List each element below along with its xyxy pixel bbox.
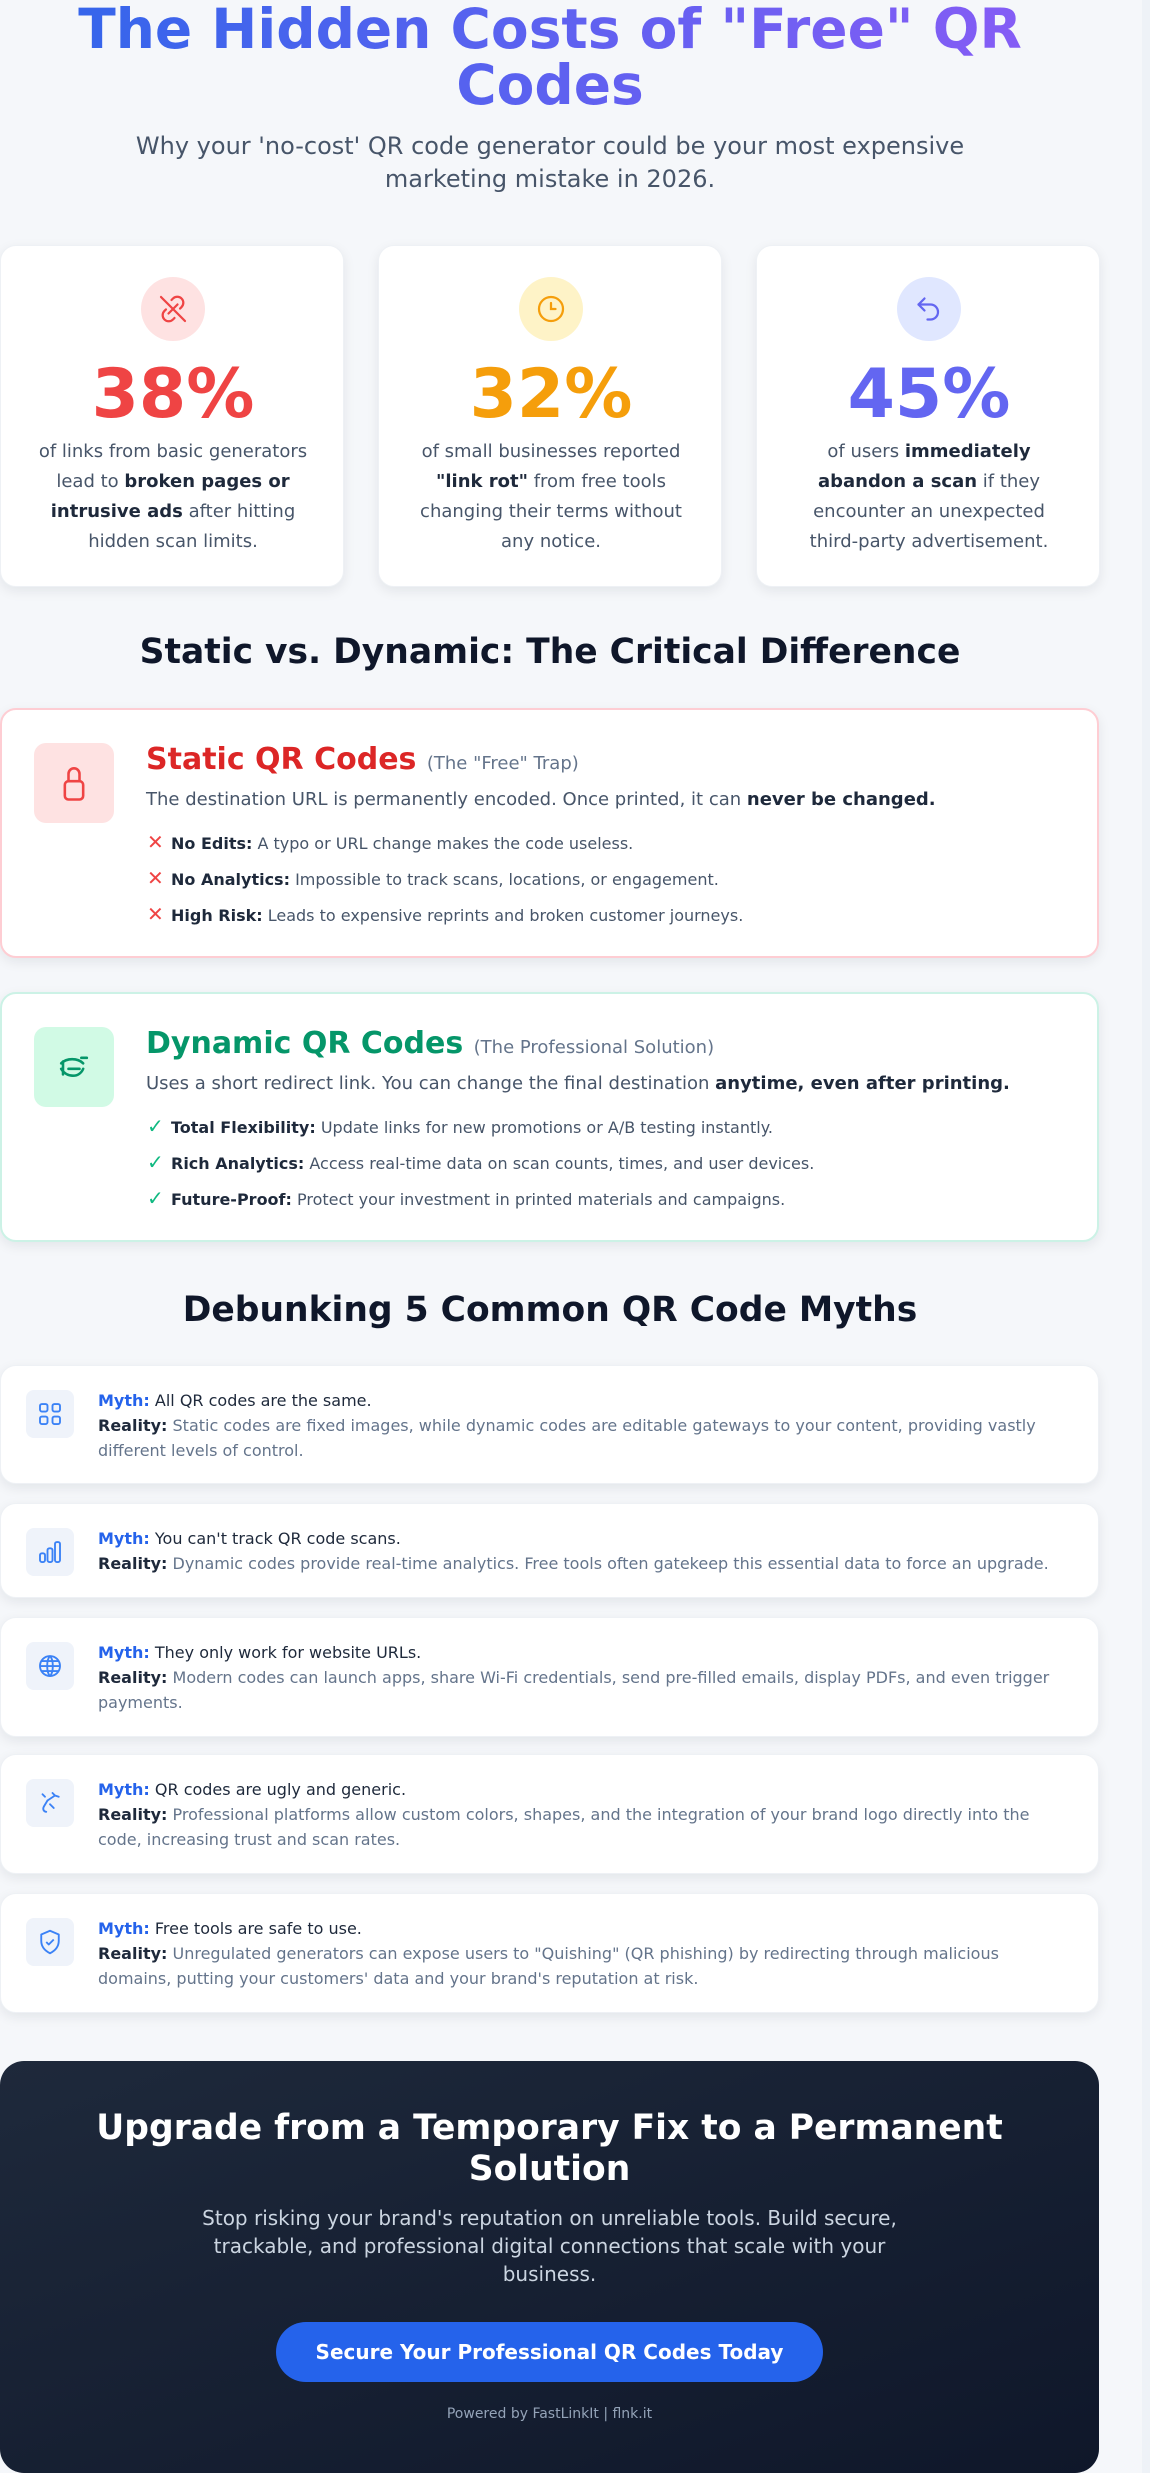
myth text: Reality: Static codes are fixed images, while dynamic codes are editable gateways to your content, providing vastly different levels of control.	[98, 1416, 1036, 1460]
panel: dynamic QR codes	[0, 992, 1099, 1242]
icon: globe	[26, 1642, 74, 1690]
static bullets: ✕	[147, 902, 164, 926]
icon: broken link	[141, 277, 205, 341]
icon: brush	[26, 1779, 74, 1827]
dynamic bullets	[147, 1114, 814, 1210]
dynamic description: Uses a short redirect link. You can change the final destination anytime, even after printing.	[146, 1073, 1010, 1094]
stat card 1	[0, 245, 344, 587]
static bullets: No Edits: A typo or URL change makes the code useless.	[171, 834, 633, 853]
stat card 3	[756, 245, 1100, 587]
myth card 4	[0, 1754, 1099, 1874]
dynamic bullets: Future-Proof: Protect your investment in printed materials and campaigns.	[171, 1190, 785, 1209]
myth text: Myth: You can't track QR code scans.	[98, 1529, 401, 1548]
subtitle: Why your 'no-cost' QR code generator could be your most expensive marketing mistake in 2026.	[136, 132, 964, 193]
CTA button: Secure Your Professional QR Codes Today	[316, 2340, 783, 2364]
dynamic bullets: ✓	[147, 1186, 164, 1210]
static bullets: High Risk: Leads to expensive reprints and broken customer journeys.	[171, 906, 743, 925]
footer: Powered by FastLinkIt | flnk.it	[447, 2406, 652, 2422]
myth text	[98, 1529, 1049, 1573]
static bullets: No Analytics: Impossible to track scans, locations, or engagement.	[171, 870, 719, 889]
static bullets: ✕	[147, 830, 164, 854]
stat card 2	[378, 245, 722, 587]
title	[0, 1, 1100, 113]
myth text: Reality: Professional platforms allow custom colors, shapes, and the integration of your brand logo directly into the code, increasing trust and scan rates.	[98, 1805, 1030, 1849]
myth text: Myth: Free tools are safe to use.	[98, 1919, 362, 1938]
stat text: of links from basic generators lead to broken pages or intrusive ads after hitting hidden scan limits.	[39, 441, 307, 552]
static title: Static QR Codes (The "Free" Trap)	[146, 742, 579, 777]
dynamic bullets: ✓	[147, 1114, 164, 1138]
heading: myths: Debunking 5 Common QR Code Myths	[183, 1290, 917, 1330]
myth text	[98, 1780, 1030, 1849]
myth text: Myth: All QR codes are the same.	[98, 1391, 372, 1410]
CTA text: Stop risking your brand's reputation on unreliable tools. Build secure, trackable, and professional digital connections that scale with your business.	[202, 2206, 897, 2286]
myth text	[98, 1643, 1050, 1712]
panel: call to action	[0, 2061, 1099, 2473]
right edge strip	[1142, 0, 1150, 2473]
dynamic bullets: ✓	[147, 1150, 164, 1174]
icon: return arrow	[897, 277, 961, 341]
myth card 1	[0, 1365, 1099, 1484]
icon: bar chart	[26, 1528, 74, 1576]
myth text	[98, 1391, 1036, 1460]
dynamic bullets: Rich Analytics: Access real-time data on scan counts, times, and user devices.	[171, 1154, 814, 1173]
panel: static QR codes	[0, 708, 1099, 958]
myth text	[98, 1919, 999, 1988]
myth card 2	[0, 1503, 1099, 1598]
static bullets: ✕	[147, 866, 164, 890]
myth text: Reality: Dynamic codes provide real-time analytics. Free tools often gatekeep this essential data to force an upgrade.	[98, 1554, 1049, 1573]
stat text: of small businesses reported "link rot" from free tools changing their terms without any notice.	[420, 441, 682, 552]
stat number: 45%	[848, 355, 1010, 434]
dynamic title: Dynamic QR Codes (The Professional Solution)	[146, 1026, 714, 1061]
myth card 5	[0, 1893, 1099, 2013]
dynamic bullets: Total Flexibility: Update links for new promotions or A/B testing instantly.	[171, 1118, 773, 1137]
myth text: Myth: QR codes are ugly and generic.	[98, 1780, 406, 1799]
stat text: of users immediately abandon a scan if they encounter an unexpected third-party advertisement.	[810, 441, 1048, 552]
CTA button	[276, 2322, 823, 2382]
heading: static vs dynamic: Static vs. Dynamic: The Critical Difference	[140, 632, 960, 672]
icon: grid	[26, 1390, 74, 1438]
static bullets	[147, 830, 743, 926]
icon: clock	[519, 277, 583, 341]
stat number: 32%	[470, 355, 632, 434]
icon: lock	[34, 743, 114, 823]
static description: The destination URL is permanently encoded. Once printed, it can never be changed.	[146, 789, 936, 810]
title: Codes	[456, 53, 644, 117]
myth card 3	[0, 1617, 1099, 1737]
stat number: 38%	[92, 355, 254, 434]
icon: redirect	[34, 1027, 114, 1107]
myth text: Reality: Modern codes can launch apps, share Wi-Fi credentials, send pre-filled emails, display PDFs, and even trigger payments.	[98, 1668, 1049, 1712]
myth text: Myth: They only work for website URLs.	[98, 1643, 421, 1662]
myth text: Reality: Unregulated generators can expose users to "Quishing" (QR phishing) by redirecting through malicious domains, putting your customers' data and your brand's reputation at risk.	[98, 1944, 999, 1988]
icon: shield	[26, 1918, 74, 1966]
CTA heading: Upgrade from a Temporary Fix to a Permanent Solution	[96, 2108, 1003, 2189]
